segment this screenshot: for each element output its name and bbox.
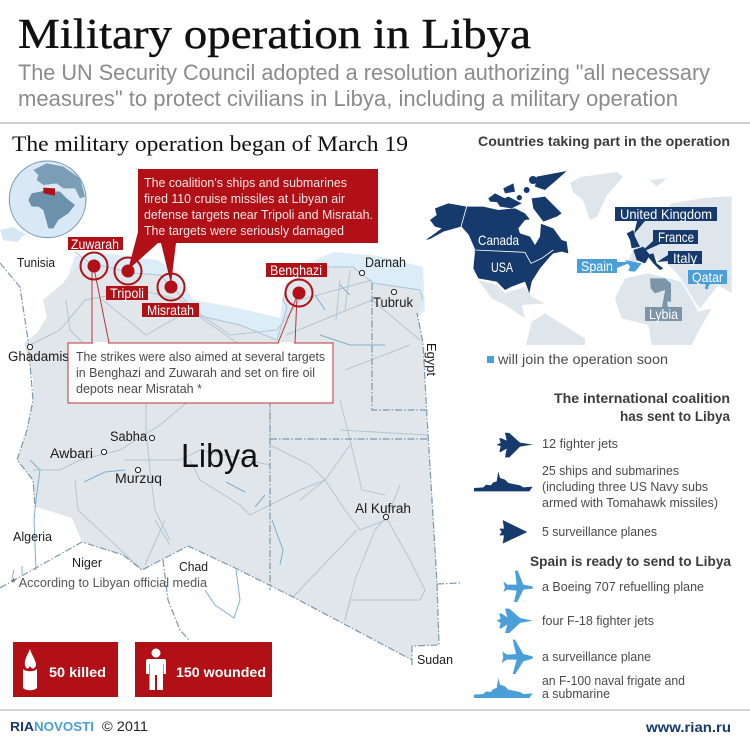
logo [10, 719, 94, 734]
Old world [615, 178, 732, 345]
footnote: * According to Libyan official media [11, 576, 207, 590]
subtitle [18, 60, 710, 111]
item: ships and submarines: 25 ships and submarines [542, 463, 679, 478]
city labels [8, 255, 453, 667]
icon: person [146, 648, 166, 690]
heading: coalition [554, 391, 730, 424]
callout: other strikes: in Benghazi and Zuwarah and set on fire oil [76, 365, 315, 380]
item: ships and submarines: armed with Tomahawk missiles) [542, 495, 718, 510]
item: F-18 jets: four F-18 fighter jets [542, 613, 654, 628]
label: United Kingdom [615, 206, 717, 234]
item: frigate: a submarine [542, 686, 610, 701]
city labels: Algeria [13, 530, 52, 544]
label: United Kingdom: United Kingdom [620, 206, 712, 222]
city labels: Ghadamis [8, 349, 69, 364]
title: Military operation in Libya [18, 12, 531, 58]
city labels: Tubruk [373, 295, 413, 310]
label: France: France [658, 229, 694, 245]
Libya land [17, 262, 439, 660]
item: frigate: an F-100 naval frigate and [542, 673, 685, 688]
item: surveillance planes: 5 surveillance planes [542, 524, 657, 539]
rivers [12, 285, 385, 618]
label: France [640, 229, 698, 253]
item: frigate [474, 673, 685, 701]
strike marker: Zuwarah [68, 236, 123, 280]
legend: will join the operation soon [497, 351, 668, 367]
strike marker: Misratah: Misratah [147, 302, 194, 318]
city labels: Tunisia [17, 256, 55, 270]
label: Lybia: Lybia [649, 306, 678, 322]
heading: operation start: The military operation began of March 19 [12, 131, 408, 156]
logo: RIA [10, 719, 35, 734]
label: Lybia [645, 291, 682, 322]
heading: coalition: The international coalition [554, 391, 730, 406]
item: ships and submarines [474, 463, 718, 510]
label: Italy [657, 250, 702, 266]
strike marker: Tripoli [106, 258, 148, 301]
world map: Canada [478, 232, 519, 248]
item: fighter jets [497, 433, 618, 457]
world map [426, 171, 732, 345]
logo: NOVOSTI [34, 719, 94, 734]
panel: 150 wounded [135, 642, 272, 697]
sea halo [60, 252, 425, 345]
Sicily sea patch [0, 227, 25, 242]
Libya [650, 278, 671, 302]
label: Qatar: Qatar [692, 269, 723, 285]
strike marker: Tripoli: Tripoli [110, 285, 144, 301]
heading: countries: Countries taking part in the operation [478, 134, 730, 149]
label: Spain [577, 258, 632, 274]
callout: other strikes: depots near Misratah * [76, 381, 202, 396]
item: surveillance planes [499, 520, 657, 544]
callout: cruise missiles: The coalition's ships and submarines [144, 175, 347, 190]
callout: cruise missiles: fired 110 cruise missiles at Libyan air [144, 191, 346, 206]
icon: candle [23, 649, 37, 690]
item: surveillance plane: a surveillance plane [542, 649, 651, 664]
city labels: Chad [179, 560, 208, 574]
Qatar [705, 286, 708, 289]
globe icon with Libya marker [9, 161, 86, 238]
item: Boeing 707: a Boeing 707 refuelling plane [542, 579, 704, 594]
strike marker: Misratah [142, 274, 199, 318]
panel: 150 wounded: 150 wounded [176, 664, 266, 680]
item: fighter jets: 12 fighter jets [542, 436, 618, 451]
city labels: Al Kufrah [355, 501, 411, 516]
label: Spain: Spain [581, 258, 613, 274]
country label: Libya: Libya [181, 437, 259, 474]
Americas: light land [478, 280, 585, 345]
heading: Spain: Spain is ready to send to Libya [530, 554, 731, 569]
coast line [75, 252, 423, 340]
strike marker: Zuwarah: Zuwarah [71, 236, 119, 252]
label: Italy: Italy [673, 250, 697, 266]
city labels: Awbari [50, 446, 93, 461]
subtitle: The UN Security Council adopted a resolution authorizing "all necessary [18, 60, 710, 85]
item: surveillance plane [502, 640, 651, 674]
item: Boeing 707 [503, 571, 704, 602]
city labels: Sabha [110, 429, 147, 444]
city labels: Egypt [424, 343, 438, 377]
roads [30, 270, 428, 620]
panel: 50 killed [13, 642, 118, 697]
map of Libya [0, 227, 460, 665]
strike marker: Benghazi: Benghazi [270, 262, 322, 278]
callout: other strikes [68, 268, 333, 403]
city markers [27, 270, 397, 520]
callout: cruise missiles: defense targets near Tripoli and Misratah. [144, 207, 373, 222]
Spain [625, 260, 642, 272]
city labels: Darnah [365, 255, 406, 270]
subtitle: measures" to protect civilians in Libya, including a military operation [18, 86, 678, 111]
heading: coalition: has sent to Libya [620, 409, 730, 424]
borders [0, 263, 460, 665]
Greenland [570, 172, 623, 220]
website: www.rian.ru [645, 719, 731, 735]
panel: 50 killed: 50 killed [49, 664, 106, 680]
callout: cruise missiles [128, 169, 378, 284]
copyright: © 2011 [102, 718, 148, 734]
city labels: Murzuq [115, 471, 162, 486]
item: ships and submarines: (including three US Navy subs [542, 479, 708, 494]
North America [426, 171, 568, 293]
world map: USA [491, 259, 513, 275]
callout: other strikes: The strikes were also aimed at several targets [76, 349, 325, 364]
strike marker: Benghazi [266, 262, 327, 306]
callout: cruise missiles: The targets were seriously damaged [144, 223, 344, 238]
city labels: Sudan [417, 653, 453, 667]
item: F-18 jets [497, 609, 654, 633]
city labels: Niger [72, 556, 102, 570]
